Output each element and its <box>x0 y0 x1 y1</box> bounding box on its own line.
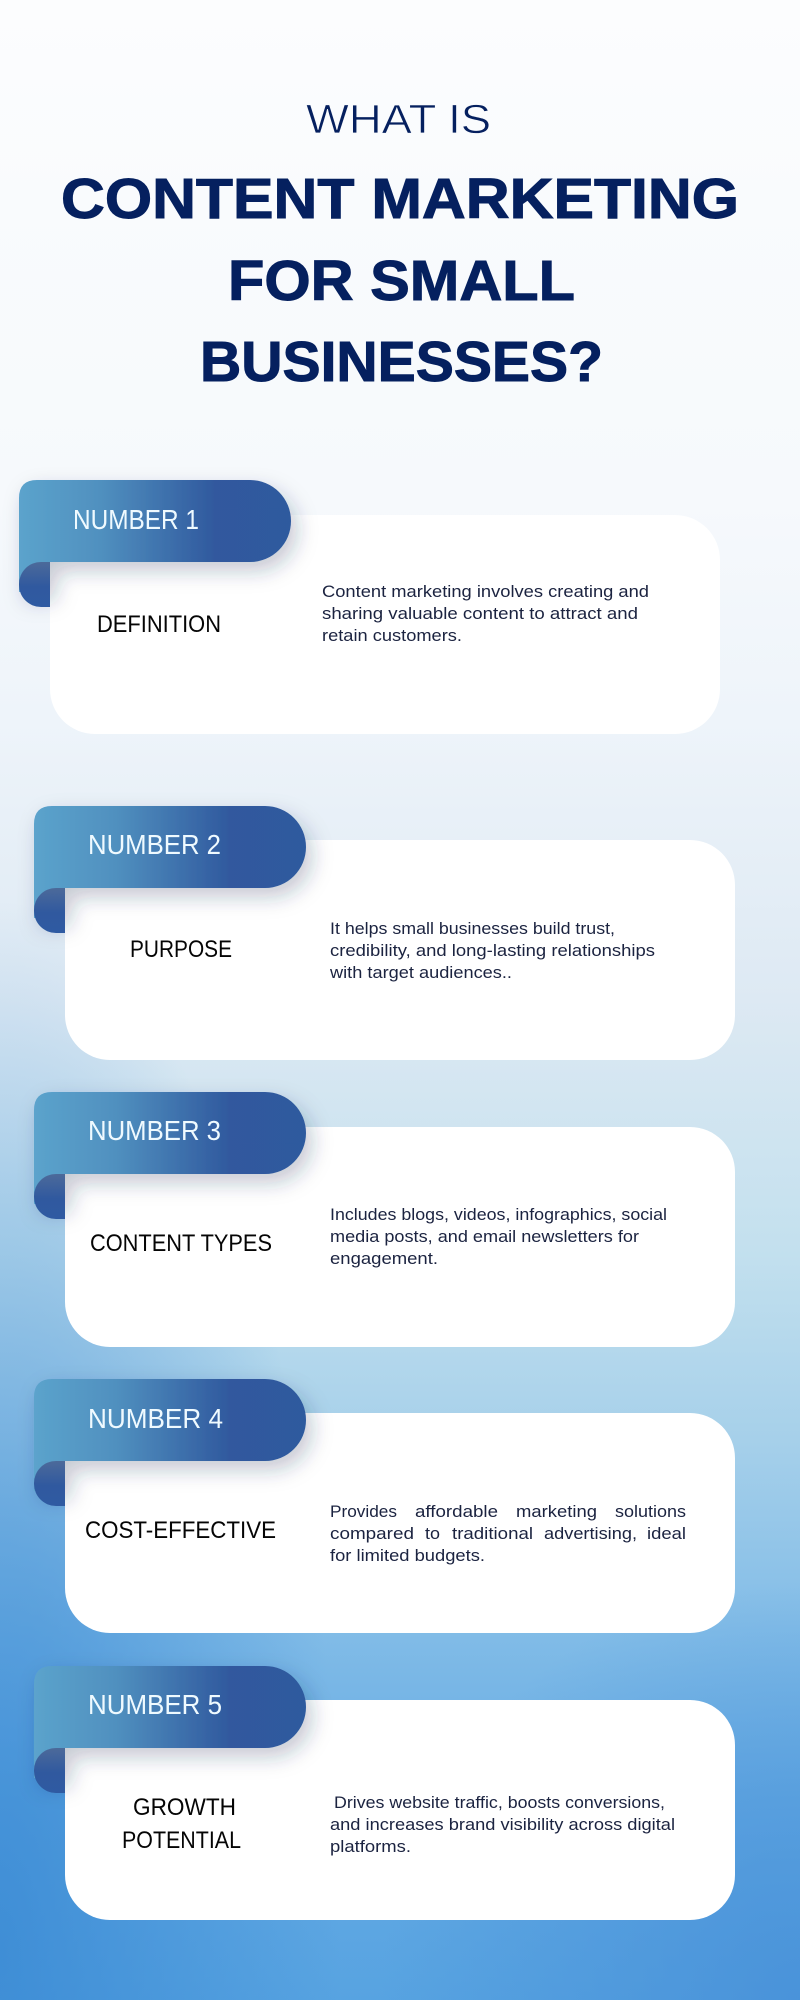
ribbon: number 1 <box>19 480 291 607</box>
description: with target audiences.. <box>329 963 512 982</box>
description: ideal <box>647 1524 686 1543</box>
title <box>61 96 739 394</box>
description <box>330 1502 686 1565</box>
label: definition: DEFINITION <box>97 611 221 638</box>
description: media posts, and email newsletters for <box>330 1227 639 1246</box>
description: compared <box>330 1524 414 1543</box>
card background <box>50 515 720 734</box>
ribbon: number 4 <box>34 1379 306 1506</box>
title line: for small: FOR SMALL <box>228 249 575 313</box>
label: growth potential: POTENTIAL <box>122 1827 241 1854</box>
description: solutions <box>615 1502 686 1521</box>
description: for limited budgets. <box>330 1546 485 1565</box>
label: growth potential <box>122 1794 241 1854</box>
description <box>329 919 655 982</box>
description: and increases brand visibility across digital <box>330 1815 675 1834</box>
description <box>322 582 649 645</box>
description <box>330 1793 675 1856</box>
title line: what is: WHAT IS <box>306 96 491 142</box>
ribbon: number 3 <box>34 1092 306 1219</box>
description: traditional <box>452 1524 533 1543</box>
panel: cost-effective <box>34 1379 735 1633</box>
card background <box>65 1127 735 1347</box>
panel: growth potential <box>34 1666 735 1920</box>
label: growth potential: GROWTH <box>133 1794 236 1821</box>
ribbon: number 4: NUMBER 4 <box>88 1403 223 1434</box>
label: purpose: PURPOSE <box>130 936 232 963</box>
description: Drives website traffic, boosts conversions, <box>334 1793 665 1812</box>
description: marketing <box>516 1502 597 1521</box>
description: retain customers. <box>322 626 462 645</box>
description: Provides <box>330 1502 397 1521</box>
ribbon: number 5 <box>34 1666 306 1793</box>
ribbon: number 3: NUMBER 3 <box>88 1115 221 1146</box>
panel: content types <box>34 1092 735 1347</box>
description: engagement. <box>330 1249 438 1268</box>
title line: content marketing: CONTENT MARKETING <box>61 167 739 231</box>
description: to <box>425 1524 440 1543</box>
description: credibility, and long-lasting relationships <box>330 941 655 960</box>
description: platforms. <box>330 1837 411 1856</box>
title line: businesses: BUSINESSES? <box>200 330 603 394</box>
description: sharing valuable content to attract and <box>322 604 638 623</box>
card background <box>65 1700 735 1920</box>
label: content types: CONTENT TYPES <box>90 1230 272 1257</box>
panel: purpose <box>34 806 735 1060</box>
card background <box>65 1413 735 1633</box>
ribbon: number 5: NUMBER 5 <box>88 1689 222 1720</box>
ribbon: number 2: NUMBER 2 <box>88 829 221 860</box>
card background <box>65 840 735 1060</box>
description: Includes blogs, videos, infographics, social <box>330 1205 667 1224</box>
panel: definition <box>19 480 720 734</box>
ribbon: number 1: NUMBER 1 <box>73 504 199 535</box>
description: Content marketing involves creating and <box>322 582 649 601</box>
description: advertising, <box>544 1524 637 1543</box>
description: affordable <box>415 1502 498 1521</box>
ribbon: number 2 <box>34 806 306 933</box>
description: It helps small businesses build trust, <box>330 919 615 938</box>
label: cost-effective: COST-EFFECTIVE <box>85 1517 276 1544</box>
description <box>330 1205 667 1268</box>
